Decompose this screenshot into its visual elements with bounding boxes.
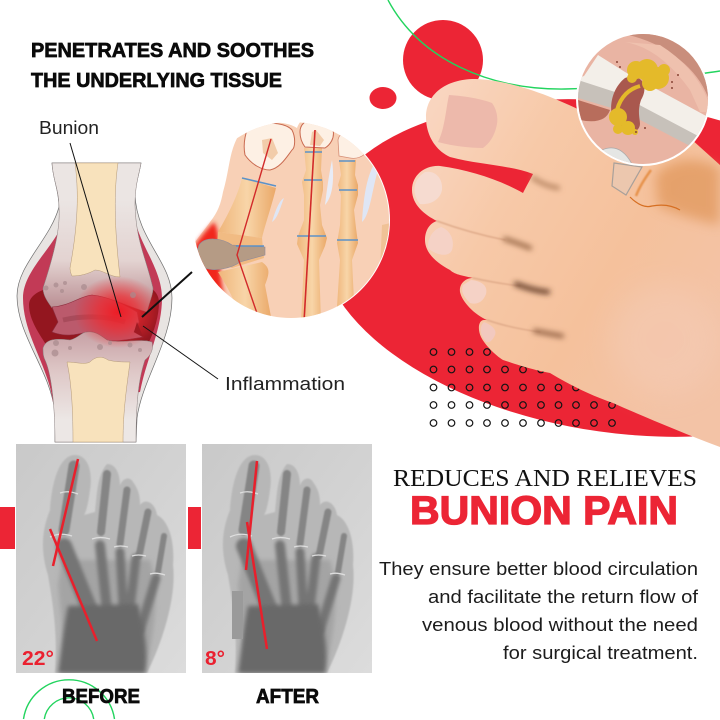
title xyxy=(31,39,314,92)
soft tissue shell xyxy=(17,163,172,442)
body text xyxy=(379,558,699,663)
upper bone head xyxy=(43,163,153,312)
magnifier: joint detail inset xyxy=(576,34,708,166)
angle: 8 degrees: 8° xyxy=(205,648,225,670)
large red ellipse backdrop xyxy=(297,62,720,474)
toenail: second toe xyxy=(415,172,442,204)
toe nails xyxy=(244,123,295,170)
bone spurs xyxy=(44,281,142,356)
red tab middle xyxy=(188,507,201,549)
second toe bones xyxy=(297,148,327,322)
bunion redness xyxy=(655,160,720,225)
dot grid xyxy=(430,349,615,426)
illustration: inflamed joint xyxy=(17,163,172,442)
lower bone head xyxy=(43,332,153,442)
leader lines xyxy=(70,143,218,379)
label: BEFORE: BEFORE xyxy=(62,686,140,708)
x-ray: after xyxy=(202,444,372,673)
lower cream bone xyxy=(67,357,130,442)
toe pad xyxy=(612,163,642,195)
inflammation glow xyxy=(74,276,162,348)
green circles bottom xyxy=(24,680,114,719)
toenail: big toe xyxy=(438,95,497,148)
skin slivers xyxy=(272,198,284,222)
illustration: toe skeleton circle xyxy=(195,122,390,318)
inflammation xyxy=(195,220,228,294)
x-ray: before xyxy=(16,444,186,673)
red tab left xyxy=(0,507,15,549)
green curved line xyxy=(388,0,720,89)
bunion bone xyxy=(198,239,265,270)
body text: for surgical treatment. xyxy=(503,642,698,663)
red circle xyxy=(403,20,483,100)
body text: They ensure better blood circulation xyxy=(379,558,698,579)
toenail: fourth toe xyxy=(462,280,486,304)
axis lines xyxy=(237,139,271,322)
title: THE UNDERLYING TISSUE xyxy=(31,69,282,92)
label: AFTER: AFTER xyxy=(256,686,320,708)
small red dot xyxy=(370,87,396,109)
third toe bones xyxy=(337,160,358,306)
photo: foot with toes xyxy=(412,79,720,447)
foot silhouette xyxy=(196,122,389,318)
angle: 22 degrees: 22° xyxy=(22,648,54,670)
first toe bones xyxy=(218,178,276,238)
upper cream bone xyxy=(70,163,120,277)
label: Inflammation: Inflammation xyxy=(225,373,345,394)
lighter lower foot xyxy=(610,285,720,395)
fourth toe hint xyxy=(380,224,389,260)
heading: bunion pain: BUNION PAIN xyxy=(410,489,678,533)
body text: and facilitate the return flow of xyxy=(428,586,699,607)
label: Bunion: Bunion xyxy=(39,118,99,138)
toenail: third toe xyxy=(428,227,453,255)
toenail: fifth toe xyxy=(481,322,495,342)
title: PENETRATES AND SOOTHES xyxy=(31,39,314,62)
toe separations xyxy=(437,221,540,332)
heading: reduces and relieves: REDUCES AND RELIEVES xyxy=(393,466,697,492)
cartilage xyxy=(52,295,143,341)
body text: venous blood without the need xyxy=(422,614,698,635)
joint marks xyxy=(236,152,358,246)
